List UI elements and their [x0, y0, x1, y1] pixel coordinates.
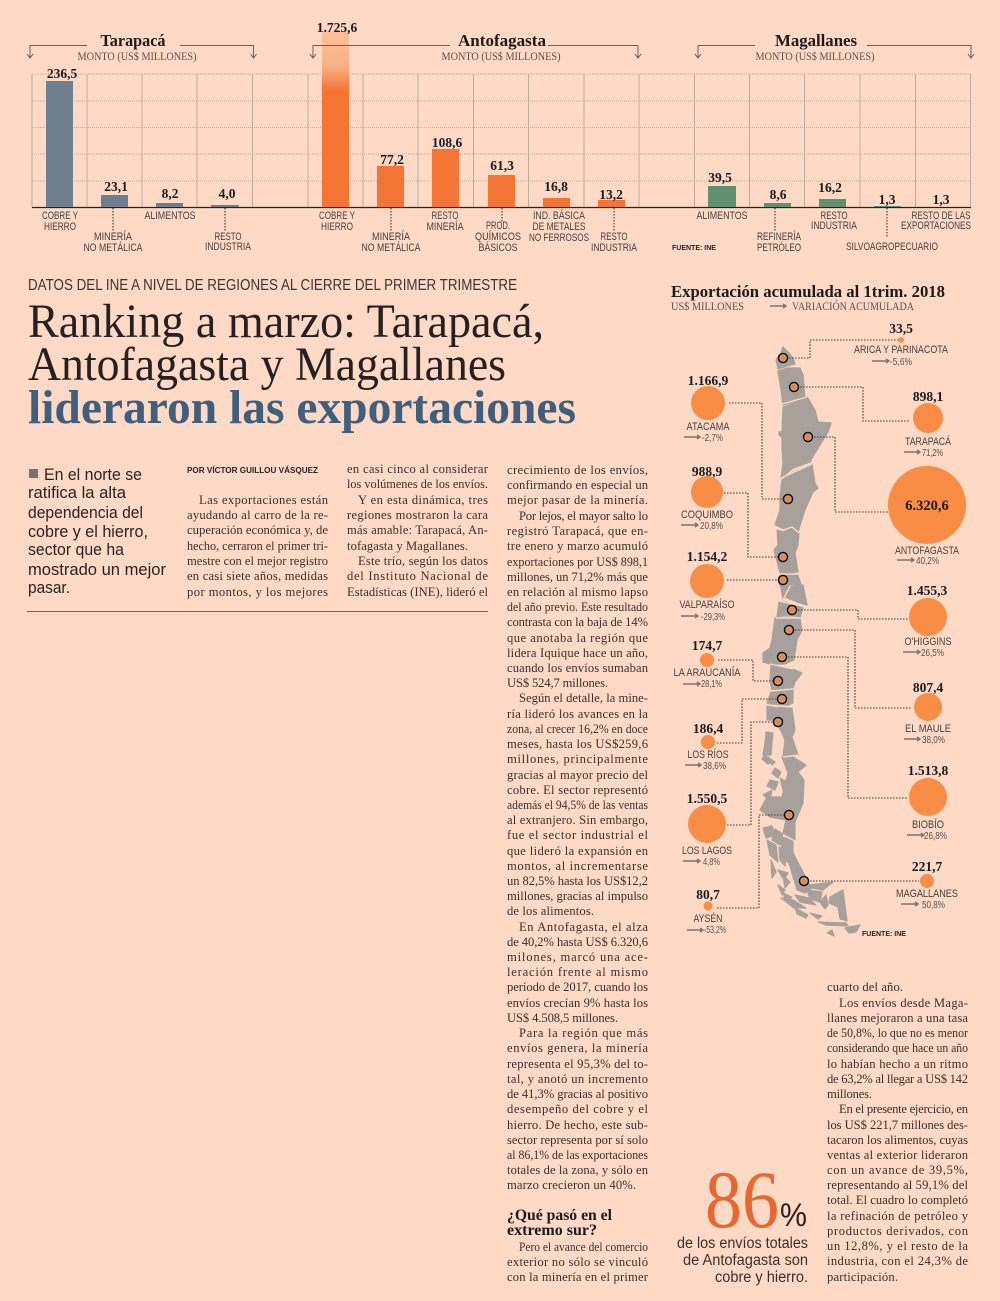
- region: Los Lagos: 4,8%: [703, 857, 720, 868]
- region: Biobío: 26,8%: [924, 831, 947, 842]
- region: Magallanes: [896, 859, 958, 911]
- subheading: ¿Qué pasó en el: [507, 1207, 613, 1224]
- region: Biobío: [907, 763, 948, 842]
- text column 2: Este trío, según los datos: [358, 554, 488, 568]
- text column 3: mejor pasar de la minería.: [507, 493, 648, 507]
- region: Los Lagos: [682, 791, 732, 868]
- values: [317, 20, 623, 202]
- sector labels: RESTO: [820, 210, 848, 222]
- region: Coquimbo: 988,9: [692, 464, 722, 479]
- text column 3: En Antofagasta, el alza: [519, 920, 648, 934]
- sector labels: [42, 208, 252, 254]
- text column 4: con un avance de 39,5%,: [827, 1163, 968, 1177]
- text column 3: montos, al incrementarse: [507, 859, 648, 873]
- region: La Araucanía: 174,7: [692, 638, 722, 653]
- text column 1: Las exportaciones están: [199, 493, 329, 507]
- text column 1: por montos, y los mejores: [187, 585, 328, 599]
- values: 1.725,6: [317, 20, 358, 35]
- region: Valparaíso: -29,3%: [701, 612, 725, 623]
- region: La Araucanía: [674, 638, 741, 690]
- text column 4: de 63,2% al llegar a US$ 142: [827, 1072, 968, 1086]
- text column 3: en relación al mismo lapso: [507, 585, 648, 599]
- sector labels: MINERÍA: [426, 220, 464, 233]
- text column 3: que lideró la expansión en: [507, 844, 649, 858]
- text column 2: tofagasta y Magallanes.: [347, 539, 468, 553]
- region: Aysén: -53,2%: [704, 925, 726, 936]
- pull quote: sector que ha: [28, 540, 125, 559]
- text column 3: [507, 463, 649, 1284]
- text column 4: productos derivados, con: [827, 1224, 969, 1238]
- text column 3: envíos genera, la minería: [507, 1041, 648, 1055]
- text column 3: fue el sector industrial el: [507, 828, 648, 842]
- sector labels: RESTO: [432, 210, 459, 222]
- text column 4: participación.: [827, 1270, 898, 1284]
- text column 4: de 50,8%, lo que no es menor: [827, 1026, 969, 1040]
- text column 3: Por lejos, el mayor salto lo: [519, 509, 648, 523]
- region: Atacama: -2,7%: [702, 433, 723, 444]
- sector labels: RESTO: [214, 231, 242, 243]
- region: Coquimbo: 20,8%: [700, 521, 723, 532]
- text column 3: tre enero y marzo acumuló: [507, 539, 648, 553]
- text column 4: lo habían hecho a un ritmo: [827, 1057, 968, 1071]
- text column 3: Para la región que más: [519, 1026, 648, 1040]
- text column 4: los US$ 221,7 millones des-: [827, 1118, 968, 1132]
- heading: Antofagasta: Antofagasta: [458, 31, 546, 50]
- values: 108,6: [432, 135, 462, 150]
- region: O'Higgins: O'HIGGINS: [904, 636, 952, 648]
- sector labels: BÁSICOS: [478, 241, 518, 254]
- sector labels: QUÍMICOS: [475, 230, 521, 243]
- text column 4: ventas al exterior lideraron: [827, 1148, 969, 1162]
- sector labels: EXPORTACIONES: [901, 220, 971, 232]
- region: Biobío: 1.513,8: [908, 763, 948, 778]
- map heading: [671, 282, 945, 313]
- sector labels: MINERÍA: [94, 230, 133, 243]
- values: 1,3: [933, 192, 950, 207]
- text column 4: [827, 980, 969, 1284]
- chart: exports by sector grid: [32, 74, 971, 208]
- pull quote: dependencia del: [28, 503, 143, 522]
- text column 3: millones, un 71,2% más que: [507, 570, 648, 584]
- region: Tarapacá: [904, 389, 952, 459]
- region: Tarapacá: 71,2%: [922, 448, 943, 459]
- text column 3: millones, principalmente: [507, 752, 648, 766]
- region: Los Lagos: LOS LAGOS: [682, 845, 732, 857]
- region: Magallanes: 221,7: [912, 859, 942, 874]
- sector labels: ALIMENTOS: [144, 210, 196, 222]
- sector labels: COBRE Y: [42, 210, 78, 222]
- text column 2: del Instituto Nacional de: [347, 569, 488, 583]
- heading: Magallanes: [695, 31, 974, 63]
- source: FUENTE: INE: [672, 245, 716, 252]
- text column 3: al extranjero. Sin embargo,: [507, 813, 648, 827]
- sector labels: ALIMENTOS: [696, 210, 748, 222]
- text column 3: totales de la zona, y sólo en: [507, 1163, 649, 1177]
- text column 3: hierro. De hecho, este sub-: [507, 1118, 648, 1132]
- region: Coquimbo: COQUIMBO: [681, 509, 733, 521]
- text column 3: representa el 95,3% del to-: [507, 1057, 648, 1071]
- text column 3: gracias al mayor precio del: [507, 768, 648, 782]
- callout: 86 percent: de Antofagasta son: [683, 1252, 808, 1269]
- text column 2: en casi cinco al considerar: [347, 462, 489, 476]
- text column 3: de los alimentos.: [507, 904, 594, 918]
- text column 3: cobre. El sector representó: [507, 783, 648, 797]
- sector labels: INDUSTRIA: [591, 242, 638, 254]
- map location markers: [774, 354, 812, 886]
- text column 3: crecimiento de los envíos,: [507, 463, 648, 477]
- values: 39,5: [708, 170, 732, 185]
- pull quote: En el norte se: [44, 465, 142, 484]
- text column 4: la refinación de petróleo y: [827, 1209, 969, 1223]
- region: Arica y Parinacota: -5,6%: [890, 357, 912, 368]
- text column 3: de 40,2% hasta US$ 6.320,6: [507, 935, 648, 949]
- text column 3: sector representa por sí solo: [507, 1133, 648, 1147]
- text column 4: En el presente ejercicio, en: [839, 1102, 969, 1116]
- map heading: VARIACIÓN ACUMULADA: [792, 299, 914, 313]
- text column 1: hecho, cerraron el primer tri-: [187, 539, 328, 553]
- region: O'Higgins: [903, 583, 952, 659]
- values: 61,3: [490, 158, 514, 173]
- text column 3: ría lideró los avances en la: [507, 707, 648, 721]
- text column 4: considerando que hace un año: [827, 1041, 968, 1055]
- sector labels: PROD.: [486, 220, 510, 232]
- text column 3: envíos crecían 9% hasta los: [507, 996, 648, 1010]
- text column 4: total. El cuadro lo completó: [827, 1193, 968, 1207]
- sector labels: IND. BÁSICA: [533, 209, 586, 222]
- text column 3: meses, hasta los US$259,6: [507, 737, 648, 751]
- title: [28, 295, 576, 434]
- values: 16,8: [544, 179, 568, 194]
- pull quote: cobre y el hierro,: [28, 522, 148, 541]
- text column 3: que anotaba la región que: [507, 631, 648, 645]
- pull quote: [28, 465, 166, 597]
- text column 3: período de 2017, cuando los: [507, 980, 648, 994]
- region: Los Ríos: LOS RÍOS: [688, 748, 728, 761]
- region: Atacama: ATACAMA: [686, 421, 730, 433]
- text column 4: cuarto del año.: [827, 980, 903, 994]
- text column 3: millones, gracias al impulso: [507, 889, 648, 903]
- region: El Maule: EL MAULE: [905, 723, 951, 735]
- region: El Maule: [904, 680, 951, 746]
- map heading: US$ MILLONES: [671, 299, 744, 313]
- text column 2: más amable: Tarapacá, An-: [347, 523, 488, 537]
- sector labels: MINERÍA: [372, 230, 411, 243]
- text column 3: lidera Iquique hace un año,: [507, 646, 648, 660]
- text column 3: exterior no sólo se vinculó: [507, 1255, 648, 1269]
- text column 4: un 12,8%, y el resto de la: [827, 1239, 968, 1253]
- region: Valparaíso: 1.154,2: [687, 549, 728, 564]
- text column 2: regiones mostraron la cara: [347, 508, 488, 522]
- sector labels: [696, 208, 971, 254]
- sector labels: COBRE Y: [319, 210, 355, 222]
- text column 3: tal, y anotó un incremento: [507, 1072, 648, 1086]
- pull quote: mostrado un mejor: [28, 560, 166, 579]
- region: Arica y Parinacota: 33,5: [889, 321, 913, 336]
- values: 77,2: [380, 152, 404, 167]
- region: La Araucanía: LA ARAUCANÍA: [674, 666, 741, 679]
- text column 3: confirmando en especial un: [507, 478, 649, 492]
- values: 23,1: [104, 179, 128, 194]
- text column 3: un 82,5% hasta los US$12,2: [507, 874, 648, 888]
- region: Los Lagos: 1.550,5: [687, 791, 728, 806]
- region: Antofagasta: ANTOFAGASTA: [895, 545, 960, 557]
- region: Biobío: BIOBÍO: [912, 818, 944, 831]
- text column 3: contrasta con la baja de 14%: [507, 615, 648, 629]
- text column 4: tacaron los alimentos, cuyas: [827, 1133, 968, 1147]
- text column 3: del año previo. Este resultado: [507, 600, 648, 614]
- sector labels: RESTO: [600, 231, 628, 243]
- heading: Antofagasta: [310, 31, 641, 63]
- bars: [322, 31, 625, 207]
- region: El Maule: 38,0%: [922, 735, 945, 746]
- sector labels: NO METÁLICA: [84, 241, 143, 254]
- sector labels: NO FERROSOS: [529, 232, 589, 244]
- values: [47, 66, 236, 201]
- region: El Maule: 807,4: [913, 680, 943, 695]
- map: Chile regions: [760, 347, 860, 936]
- region: La Araucanía: 28,1%: [701, 679, 722, 690]
- text column 3: Pero el avance del comercio: [519, 1240, 648, 1254]
- text column 1: cuperación económica y, de: [187, 523, 328, 537]
- sector labels: RESTO DE LAS: [912, 210, 970, 222]
- region: Antofagasta: 6.320,6: [905, 498, 949, 514]
- region: Antofagasta: 40,2%: [916, 556, 939, 567]
- sector labels: HIERRO: [44, 221, 76, 233]
- sector labels: SILVOAGROPECUARIO: [846, 241, 938, 253]
- sector labels: NO METÁLICA: [362, 241, 421, 254]
- text column 1: [187, 493, 329, 599]
- text column 3: US$ 4.508,5 millones.: [507, 1011, 618, 1025]
- heading: Magallanes: MONTO (US$ MILLONES): [756, 49, 874, 63]
- text column 4: industria, con el 24,3% de: [827, 1254, 968, 1268]
- sector labels: HIERRO: [321, 221, 353, 233]
- region: Atacama: 1.166,9: [688, 373, 728, 388]
- callout: 86 percent: de los envíos totales: [677, 1235, 808, 1252]
- subheading: [507, 1207, 613, 1239]
- callout: 86 percent: [677, 1154, 808, 1286]
- region: Atacama: [684, 373, 730, 444]
- text column 3: de 41,3% gracias al positivo: [507, 1087, 648, 1101]
- kicker: DATOS DEL INE A NIVEL DE REGIONES AL CIERRE DEL PRIMER TRIMESTRE: [28, 277, 517, 294]
- region: Tarapacá: TARAPACÁ: [905, 435, 952, 448]
- map source: FUENTE: INE: [862, 931, 906, 938]
- text column 1: ayudando al carro de la re-: [187, 508, 328, 522]
- divider rule: [27, 610, 488, 612]
- heading: Magallanes: Magallanes: [775, 31, 857, 50]
- text column 3: milones, marcó una ace-: [507, 950, 648, 964]
- text column 4: Los envíos desde Maga-: [839, 996, 968, 1010]
- text column 2: [347, 462, 489, 599]
- text column 2: los volúmenes de los envíos.: [347, 477, 488, 491]
- subheading: extremo sur?: [507, 1222, 597, 1239]
- pull quote: ratifica la alta: [28, 483, 127, 502]
- values: 236,5: [47, 66, 77, 81]
- text column 3: además el 94,5% de las ventas: [507, 798, 648, 812]
- text column 3: US$ 524,7 millones.: [507, 676, 608, 690]
- sector labels: INDUSTRIA: [811, 220, 858, 232]
- region: Los Ríos: 38,6%: [703, 761, 726, 772]
- text column 3: desempeño del cobre y el: [507, 1102, 648, 1116]
- bars: [46, 81, 239, 207]
- text column 3: con la minería en el primer: [507, 1270, 649, 1284]
- text column 1: mestre con el mejor registro: [187, 554, 328, 568]
- heading: Tarapacá: [27, 31, 256, 63]
- sector labels: [319, 208, 638, 254]
- panel: Tarapacá bar chart: [27, 31, 256, 254]
- values: 8,2: [162, 186, 179, 201]
- values: 13,2: [599, 187, 623, 202]
- text column 3: exportaciones por US$ 898,1: [507, 555, 648, 569]
- map heading: Exportación acumulada al 1trim. 2018: [671, 282, 945, 301]
- sector labels: INDUSTRIA: [205, 241, 252, 253]
- text column 3: cuando los envíos sumaban: [507, 661, 649, 675]
- text column 2: Y en esta dinámica, tres: [358, 493, 488, 507]
- region: Aysén: 80,7: [696, 887, 720, 902]
- text column 4: millones.: [827, 1087, 872, 1101]
- values: 8,6: [770, 187, 787, 202]
- text column 3: registró Tarapacá, que en-: [507, 524, 648, 538]
- leader lines: [717, 340, 919, 908]
- text column 3: leración frente al mismo: [507, 965, 648, 979]
- region: O'Higgins: 1.455,3: [907, 583, 948, 598]
- region: Arica y Parinacota: [854, 321, 949, 368]
- region: Valparaíso: VALPARAÍSO: [680, 598, 735, 611]
- text column 1: en casi siete años, medidas: [187, 569, 328, 583]
- heading: Tarapacá: Tarapacá: [100, 31, 166, 50]
- text column 3: marzo crecieron un 40%.: [507, 1178, 636, 1192]
- callout: 86 percent: %: [780, 1197, 807, 1233]
- panel: Magallanes bar chart: [672, 31, 974, 254]
- panel: Antofagasta bar chart: [310, 20, 641, 254]
- region: Magallanes: 50,8%: [922, 900, 945, 911]
- region: Aysén: AYSÉN: [694, 912, 723, 925]
- title: Antofagasta y Magallanes: [28, 338, 506, 391]
- region: Coquimbo: [681, 464, 733, 532]
- byline: POR VÍCTOR GUILLOU VÁSQUEZ: [187, 466, 318, 475]
- heading: Antofagasta: MONTO (US$ MILLONES): [442, 49, 560, 63]
- heading: Tarapacá: MONTO (US$ MILLONES): [78, 49, 196, 63]
- region: Aysén: [687, 887, 726, 936]
- values: [708, 170, 950, 207]
- text column 4: llanes mejoraron a una tasa: [827, 1011, 968, 1025]
- sector labels: PETRÓLEO: [757, 241, 801, 254]
- region: Magallanes: MAGALLANES: [896, 888, 958, 900]
- text column 3: al 86,1% de las exportaciones: [507, 1148, 648, 1162]
- text column 2: Estadísticas (INE), lideró el: [347, 585, 488, 599]
- values: 1,3: [879, 192, 896, 207]
- callout: 86 percent: cobre y hierro.: [715, 1269, 808, 1286]
- title: Ranking a marzo: Tarapacá,: [28, 295, 544, 348]
- region: Tarapacá: 898,1: [913, 389, 943, 404]
- region: Los Ríos: 186,4: [693, 721, 723, 736]
- callout: 86 percent: 86: [705, 1154, 779, 1245]
- text column 4: representando al 59,1% del: [827, 1178, 968, 1192]
- title: lideraron las exportaciones: [28, 381, 576, 434]
- region: Los Ríos: [685, 721, 728, 772]
- sector labels: DE METALES: [532, 221, 586, 233]
- text column 3: zona, al crecer 16,2% en doce: [507, 722, 648, 736]
- sector labels: REFINERÍA: [757, 230, 801, 243]
- region: Antofagasta: [888, 466, 966, 567]
- text column 3: Según el detalle, la mine-: [519, 691, 648, 705]
- values: 4,0: [219, 186, 236, 201]
- region: Arica y Parinacota: ARICA Y PARINACOTA: [854, 344, 949, 356]
- pull quote: pasar.: [28, 578, 70, 597]
- values: 16,2: [818, 180, 842, 195]
- region: O'Higgins: 26,5%: [921, 648, 944, 659]
- region: Valparaíso: [680, 549, 735, 623]
- bars: [708, 186, 901, 207]
